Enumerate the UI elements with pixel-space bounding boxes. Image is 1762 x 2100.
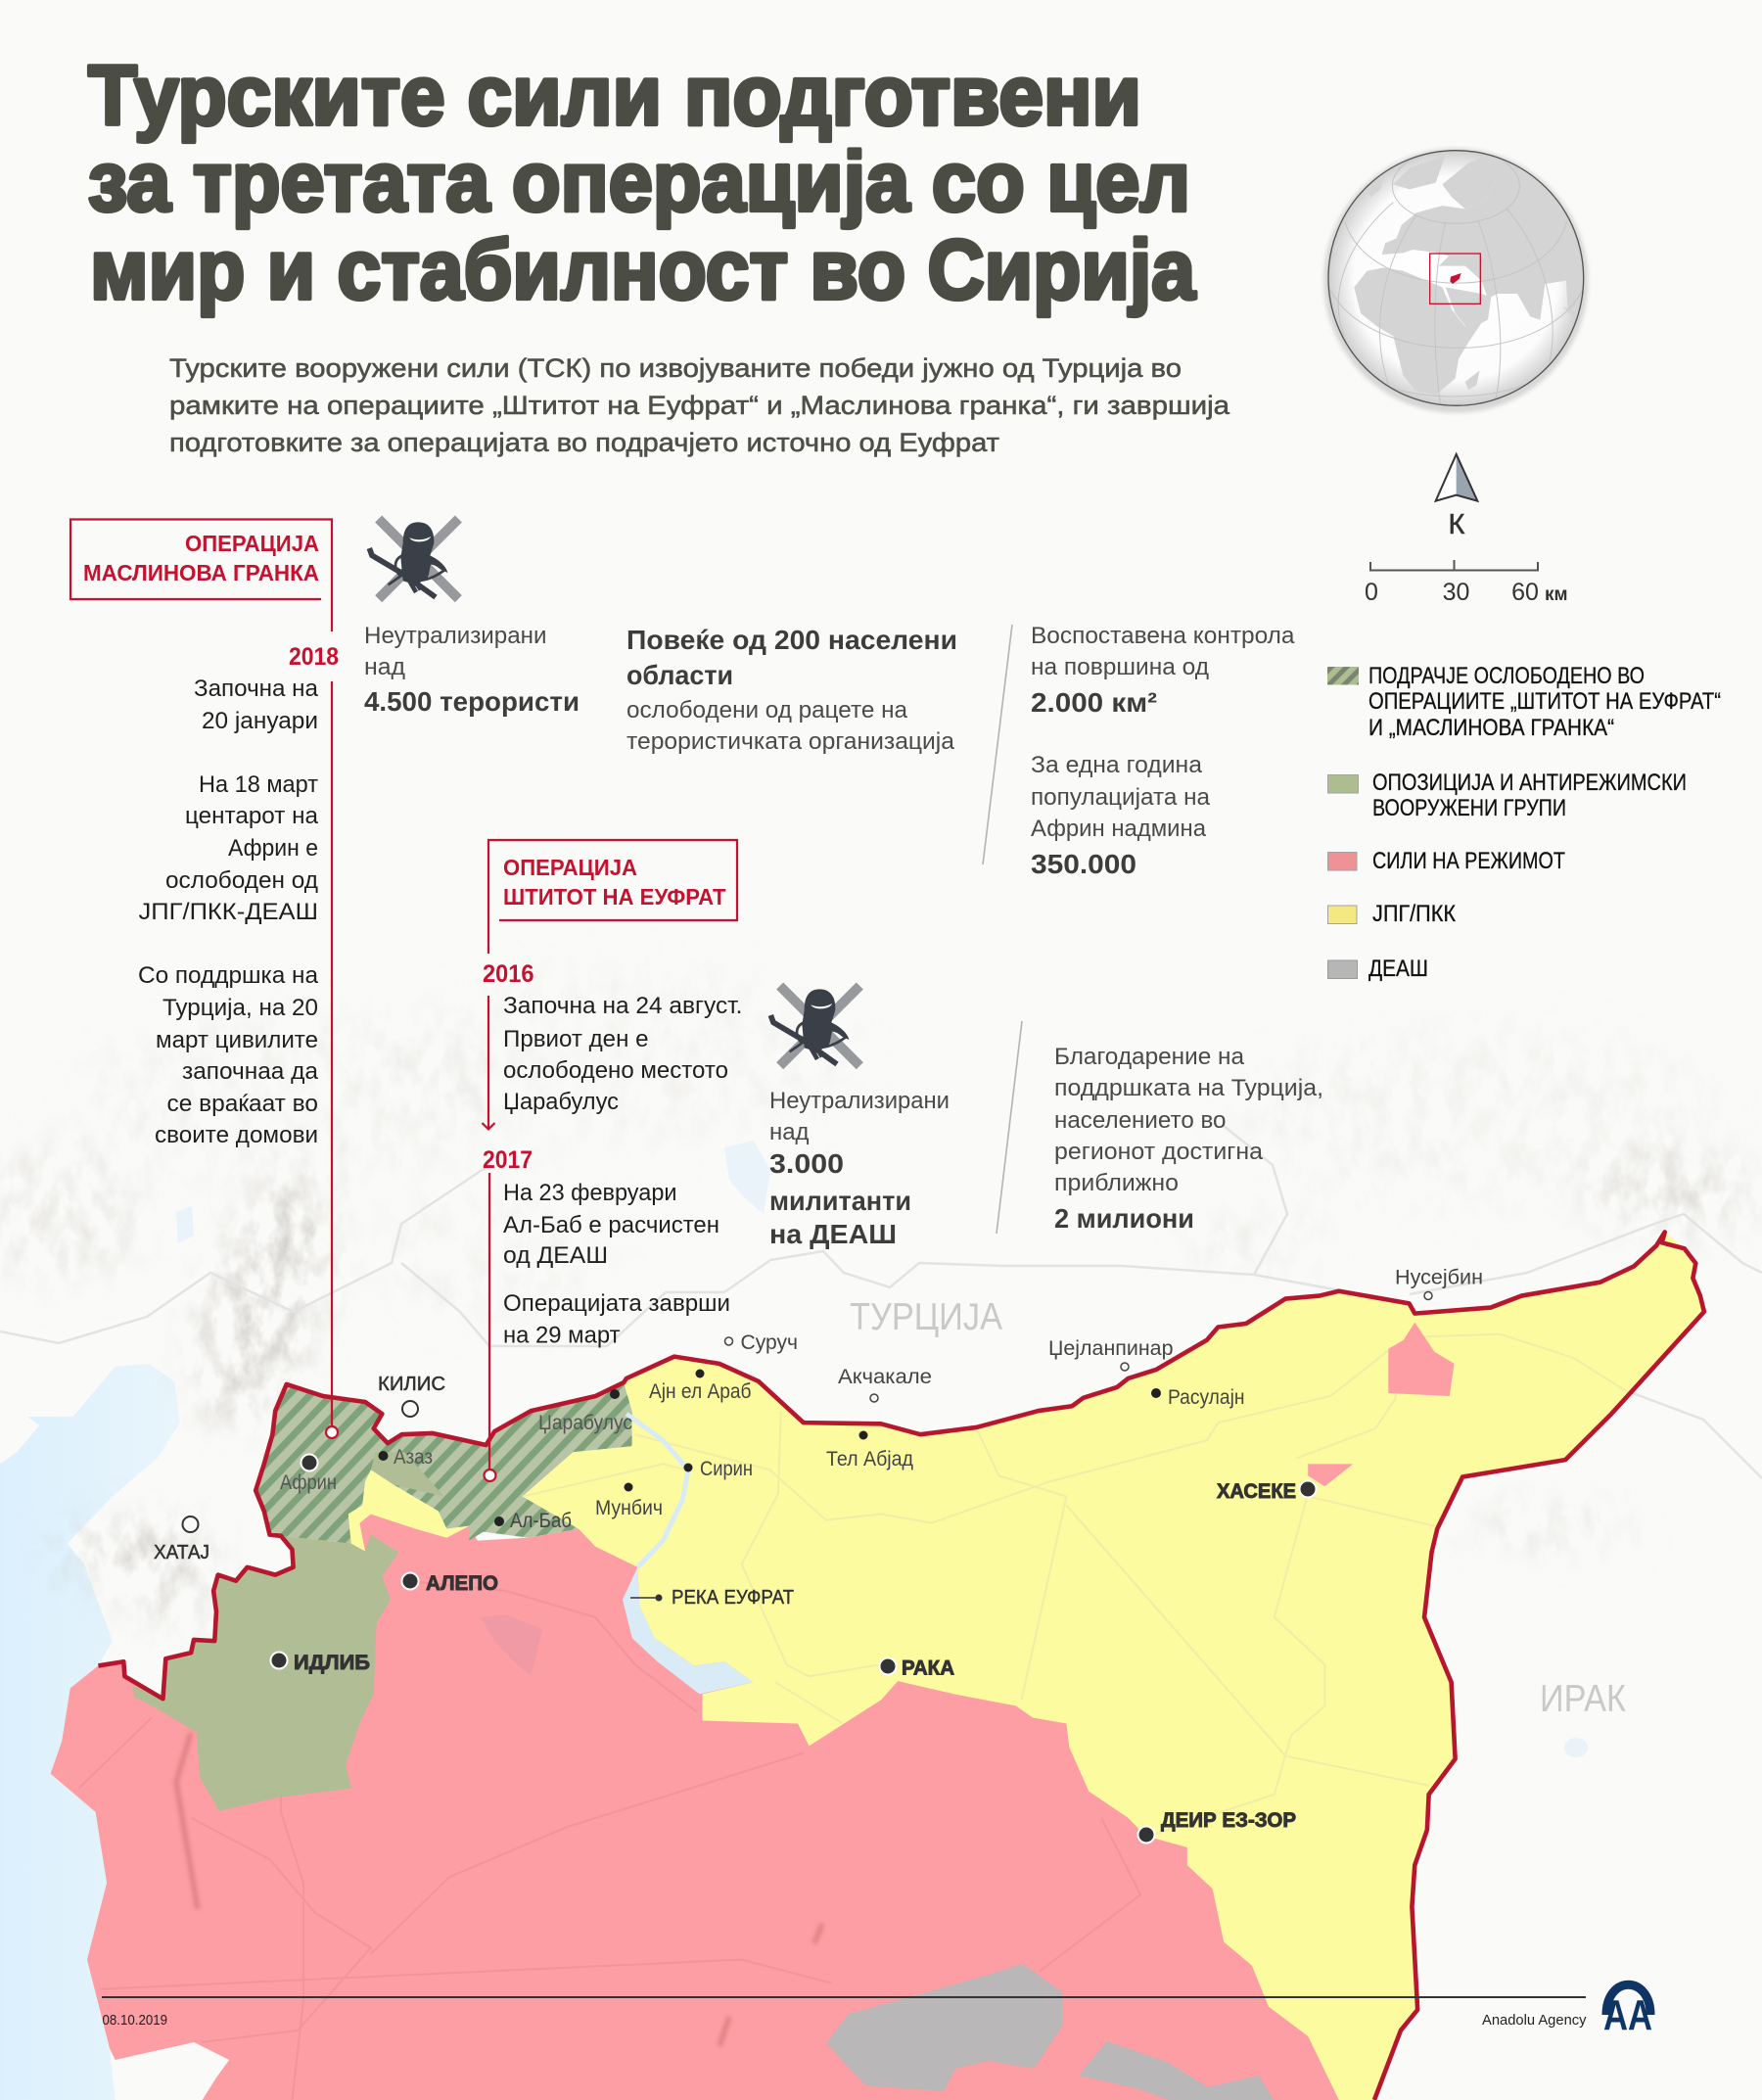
timeline text 2018: Турција, на 20 [162, 995, 318, 1021]
city: Aleppo: АЛЕПО [426, 1572, 498, 1595]
heading box: Olive Branch: МАСЛИНОВА ГРАНКА [83, 560, 319, 585]
YPG/PKK pocket near Azaz [348, 1470, 469, 1552]
north arrow [1436, 454, 1477, 540]
stat: regional population: 2 милиони [1054, 1203, 1194, 1234]
legend item: regime [1327, 848, 1565, 874]
map: control areas [51, 1232, 1704, 2100]
city: Akcakale: Акчакале [838, 1366, 932, 1388]
timeline text 2018: се враќаат во [166, 1091, 318, 1117]
title [88, 49, 1196, 317]
stat: area and Afrin population: Африн надмина [1031, 816, 1206, 842]
timeline text 2018: центарот на [185, 803, 318, 829]
timeline text 2017: од ДЕАШ [503, 1242, 608, 1269]
stat: liberated settlements [626, 625, 957, 755]
country label: Turkey: ТУРЦИЈА [850, 1296, 1002, 1338]
ISIS areas [826, 1964, 1274, 2100]
base map: sea, terrain and roads [0, 969, 1762, 2100]
scale bar: 60 [1511, 579, 1539, 606]
divider line [997, 1021, 1022, 1234]
continents [1354, 155, 1584, 395]
stat: neutralized ISIS militants: 3.000 [769, 1148, 844, 1179]
timeline text 2018: Започна на [194, 676, 318, 702]
city: Hatay [154, 1517, 209, 1563]
stat: regional population: населението во [1054, 1107, 1226, 1134]
scale bar: 30 [1443, 579, 1469, 606]
city: Raqqa [879, 1657, 954, 1680]
pink enclave at Qamishli [1388, 1323, 1454, 1396]
city: Kilis: КИЛИС [378, 1374, 445, 1395]
intro text: подготовките за операцијата во подрачјето источно од Еуфрат [169, 428, 999, 457]
stat: regional population: Благодарение на [1054, 1044, 1244, 1070]
label: Euphrates river: РЕКА ЕУФРАТ [672, 1587, 794, 1609]
legend item: YPG/PKK [1327, 901, 1456, 927]
legend item: liberated area: ПОДРАЧЈЕ ОСЛОБОДЕНО ВО [1368, 663, 1645, 689]
city: Manbij: Мунбич [595, 1497, 663, 1519]
legend item: opposition: ВООРУЖЕНИ ГРУПИ [1372, 795, 1566, 821]
timeline text 2016: Првиот ден е [503, 1026, 648, 1052]
stat: neutralized terrorists: Неутрализирани [364, 623, 546, 649]
heading box: Euphrates Shield: ШТИТОТ НА ЕУФРАТ [503, 884, 726, 910]
legend item: opposition: ОПОЗИЦИЈА И АНТИРЕЖИМСКИ [1372, 770, 1687, 796]
regime forces area [51, 1515, 1360, 2100]
panel: operation Olive Branch timeline [70, 519, 339, 1438]
locator box [1430, 254, 1480, 303]
legend item: regime: СИЛИ НА РЕЖИМОТ [1372, 848, 1565, 874]
scale bar: 0 [1365, 579, 1378, 606]
timeline text 2018: На 18 март [199, 771, 318, 798]
timeline text 2018: своите домови [155, 1122, 318, 1148]
stat: neutralized ISIS militants: милитанти [769, 1186, 911, 1216]
north arrow: К [1449, 509, 1465, 540]
city: Tell Abyad [826, 1431, 913, 1470]
stat: area and Afrin population: За една година [1031, 752, 1202, 778]
intro text [169, 353, 1230, 457]
panel: operation Euphrates Shield timeline [482, 840, 742, 1481]
stat: neutralized ISIS militants: Неутрализирани [769, 1088, 950, 1114]
YPG/PKK area [523, 1232, 1704, 2100]
legend item: YPG/PKK: ЈПГ/ПКК [1372, 901, 1456, 927]
timeline text 2016: Започна на 24 август. [503, 993, 742, 1019]
divider line [983, 625, 1012, 864]
city: Ayn al-Arab [649, 1369, 752, 1403]
city: Ayn al-Arab: Ајн ел Араб [649, 1380, 752, 1403]
city: Sirin [683, 1458, 753, 1480]
timeline text 2017: на 29 март [503, 1322, 621, 1349]
timeline text 2017: На 23 февруари [503, 1180, 677, 1206]
legend item: liberated area [1327, 663, 1721, 741]
sea [0, 1364, 180, 2100]
legend item: ISIS: ДЕАШ [1368, 956, 1428, 982]
city: Azaz [378, 1446, 433, 1469]
city: Ceylanpinar [1048, 1337, 1173, 1371]
timeline text 2018: започнаа да [182, 1058, 318, 1085]
stat: neutralized ISIS militants: над [769, 1119, 809, 1145]
timeline text 2016 [503, 993, 742, 1115]
city: Hatay: ХАТАЈ [154, 1542, 209, 1563]
stat: neutralized terrorists [364, 623, 580, 717]
stat: area and Afrin population: 350.000 [1031, 849, 1136, 879]
arrow 2016 to 2017 [482, 996, 495, 1130]
timeline text 2018: Со поддршка на [138, 962, 318, 989]
city: Ceylanpinar: Џејланпинар [1048, 1337, 1173, 1360]
city: Nusaybin [1395, 1267, 1483, 1300]
legend item: opposition [1327, 770, 1687, 821]
city: Idlib: ИДЛИБ [294, 1652, 370, 1674]
stat: liberated settlements: Повеќе од 200 населени [626, 625, 957, 655]
locator globe [1323, 149, 1588, 413]
city: Deir ez-Zor: ДЕИР ЕЗ-ЗОР [1161, 1809, 1296, 1832]
country label: Iraq: ИРАК [1540, 1678, 1626, 1720]
scale bar [1365, 560, 1568, 606]
roads [0, 1126, 1762, 1478]
city: Afrin: Африн [280, 1471, 337, 1494]
city: Al-Bab: Ал-Баб [510, 1510, 572, 1532]
city: Jarablus [538, 1389, 632, 1434]
title: Турските сили подготвени [88, 49, 1141, 143]
agency name: Anadolu Agency [1482, 2012, 1587, 2029]
year 2016: 2016 [483, 960, 534, 988]
city: Hasakah: ХАСЕКЕ [1217, 1480, 1296, 1503]
timeline text 2017: Операцијата заврши [503, 1290, 730, 1317]
stat: neutralized terrorists: над [364, 654, 405, 680]
stat: regional population [1054, 1044, 1323, 1234]
salt lake [481, 1614, 542, 1676]
stat: liberated settlements: области [626, 660, 733, 690]
timeline line to Al-Bab [484, 1173, 495, 1481]
city: Deir ez-Zor [1137, 1809, 1296, 1843]
terrain relief [0, 969, 1762, 1635]
regime area roads [78, 1582, 1140, 2100]
stat: liberated settlements: ослободени од рацете на [626, 697, 907, 723]
red border line [98, 1232, 1704, 2100]
stat: area and Afrin population: 2.000 км² [1031, 687, 1157, 718]
scale bar: км [1545, 584, 1568, 605]
city: Akcakale [838, 1366, 932, 1402]
inland lakes [176, 1141, 1588, 1757]
heading box: Olive Branch [70, 519, 332, 631]
timeline text 2018: март цивилите [156, 1027, 318, 1053]
timeline text 2016: Џарабулус [503, 1089, 619, 1115]
heading box: Euphrates Shield: ОПЕРАЦИЈА [503, 855, 637, 880]
timeline text 2018: ослободен од [165, 867, 318, 894]
intro text: рамките на операциите „Штитот на Еуфрат“ и „Маслинова гранка“, ги завршија [169, 391, 1230, 420]
city: Nusaybin: Нусејбин [1395, 1267, 1483, 1288]
city: Ras al-Ayn: Расулајн [1168, 1386, 1245, 1409]
timeline text 2018: ЈПГ/ПКК-ДЕАШ [139, 899, 318, 925]
intro text: Турските вооружени сили (ТСК) по извојуваните победи јужно од Турција во [169, 353, 1182, 383]
timeline text 2016: ослободено местото [503, 1057, 728, 1084]
city: Afrin [280, 1455, 337, 1494]
city: Azaz: Азаз [394, 1446, 433, 1469]
year 2018: 2018 [289, 643, 339, 671]
city: Raqqa: РАКА [902, 1657, 954, 1680]
timeline text 2018: 20 јануари [202, 708, 318, 734]
legend item: ISIS [1327, 956, 1428, 982]
city: Kilis [378, 1374, 445, 1417]
footer rule [102, 1996, 1586, 1998]
Syria marker [1450, 273, 1461, 284]
stat: neutralized ISIS militants [769, 1088, 950, 1249]
heading box: Euphrates Shield [488, 840, 737, 954]
icon: neutralized militant [770, 986, 859, 1066]
stat: neutralized ISIS militants: на ДЕАШ [769, 1219, 897, 1249]
pink enclave at Hasakah [1308, 1464, 1353, 1486]
stat: area and Afrin population [1031, 623, 1295, 879]
year 2017: 2017 [483, 1146, 533, 1174]
timeline text 2017 [503, 1180, 730, 1349]
title: за третата операција со цел [88, 135, 1190, 229]
stat: regional population: регионот достигна [1054, 1139, 1263, 1165]
heading box: Olive Branch: ОПЕРАЦИЈА [185, 531, 319, 556]
Euphrates river and lake [623, 1414, 753, 1694]
timeline text 2018 [138, 676, 318, 1148]
stat: area and Afrin population: Воспоставена контрола [1031, 623, 1295, 649]
map labels: cities [154, 1267, 1483, 1843]
timeline text 2017: Ал-Баб е расчистен [503, 1212, 719, 1238]
liberated hatched area [255, 1382, 632, 1544]
opposition area [132, 1535, 399, 1811]
timeline line to Afrin [326, 681, 338, 1438]
stat: area and Afrin population: на површина од [1031, 654, 1209, 680]
city: Jarablus: Џарабулус [538, 1412, 632, 1434]
timeline text 2018: Африн е [228, 835, 318, 862]
city: Tell Abyad: Тел Абјад [826, 1448, 913, 1470]
stat: regional population: приближно [1054, 1170, 1179, 1196]
regime area relief [176, 1733, 822, 2046]
title: мир и стабилност во Сирија [90, 223, 1196, 317]
city: Suruc: Суруч [740, 1331, 798, 1354]
stat: neutralized terrorists: 4.500 терористи [364, 686, 580, 717]
icon: neutralized terrorist [369, 519, 458, 599]
city: Manbij [595, 1482, 663, 1519]
graticule [1330, 149, 1583, 406]
stat: regional population: поддршката на Турција, [1054, 1075, 1323, 1101]
legend [1327, 663, 1721, 982]
stat: liberated settlements: терористичката организација [626, 728, 954, 755]
stat: area and Afrin population: популацијата на [1031, 784, 1210, 811]
date: 08.10.2019 [102, 2012, 167, 2029]
icon: Anadolu Agency logo: AA [1603, 1991, 1652, 2039]
city: Sirin: Сирин [700, 1458, 753, 1480]
legend item: liberated area: И „МАСЛИНОВА ГРАНКА“ [1368, 715, 1614, 741]
roads in YPG/PKK area [523, 1334, 1630, 1836]
